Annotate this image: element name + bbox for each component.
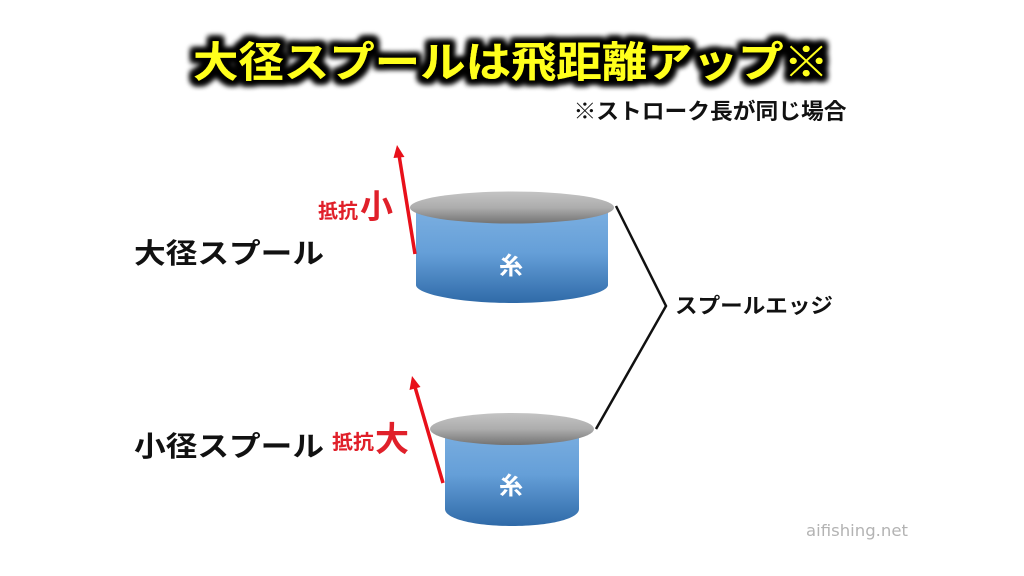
label: large spool: 大径スプール: [134, 238, 324, 269]
small spool line label: 糸: [499, 473, 523, 500]
arrow: large spool resistance: [394, 145, 415, 254]
label: high resistance: 大: [375, 421, 409, 459]
note: same stroke length: ※ストローク長が同じ場合: [574, 99, 846, 124]
label: small spool: 小径スプール: [134, 431, 324, 462]
label: high resistance: [332, 421, 409, 459]
large spool: [410, 192, 614, 303]
label: high resistance: 抵抗: [332, 431, 374, 454]
label: low resistance: [318, 188, 393, 225]
small spool body: [445, 432, 579, 526]
watermark: aifishing.net: [806, 521, 908, 540]
label: low resistance: 小: [360, 188, 393, 225]
title: 大径スプールは飛距離アップ※: [193, 39, 829, 86]
small spool edge: [430, 413, 594, 445]
large spool body: [416, 212, 608, 303]
label: low resistance: 抵抗: [318, 200, 358, 223]
small spool: [430, 413, 594, 526]
large spool line label: 糸: [499, 253, 523, 280]
label: spool edge: スプールエッジ: [675, 295, 833, 318]
bracket lines: spool edge: [596, 206, 666, 429]
large spool edge: [410, 192, 614, 224]
arrow: small spool resistance: [410, 376, 443, 483]
